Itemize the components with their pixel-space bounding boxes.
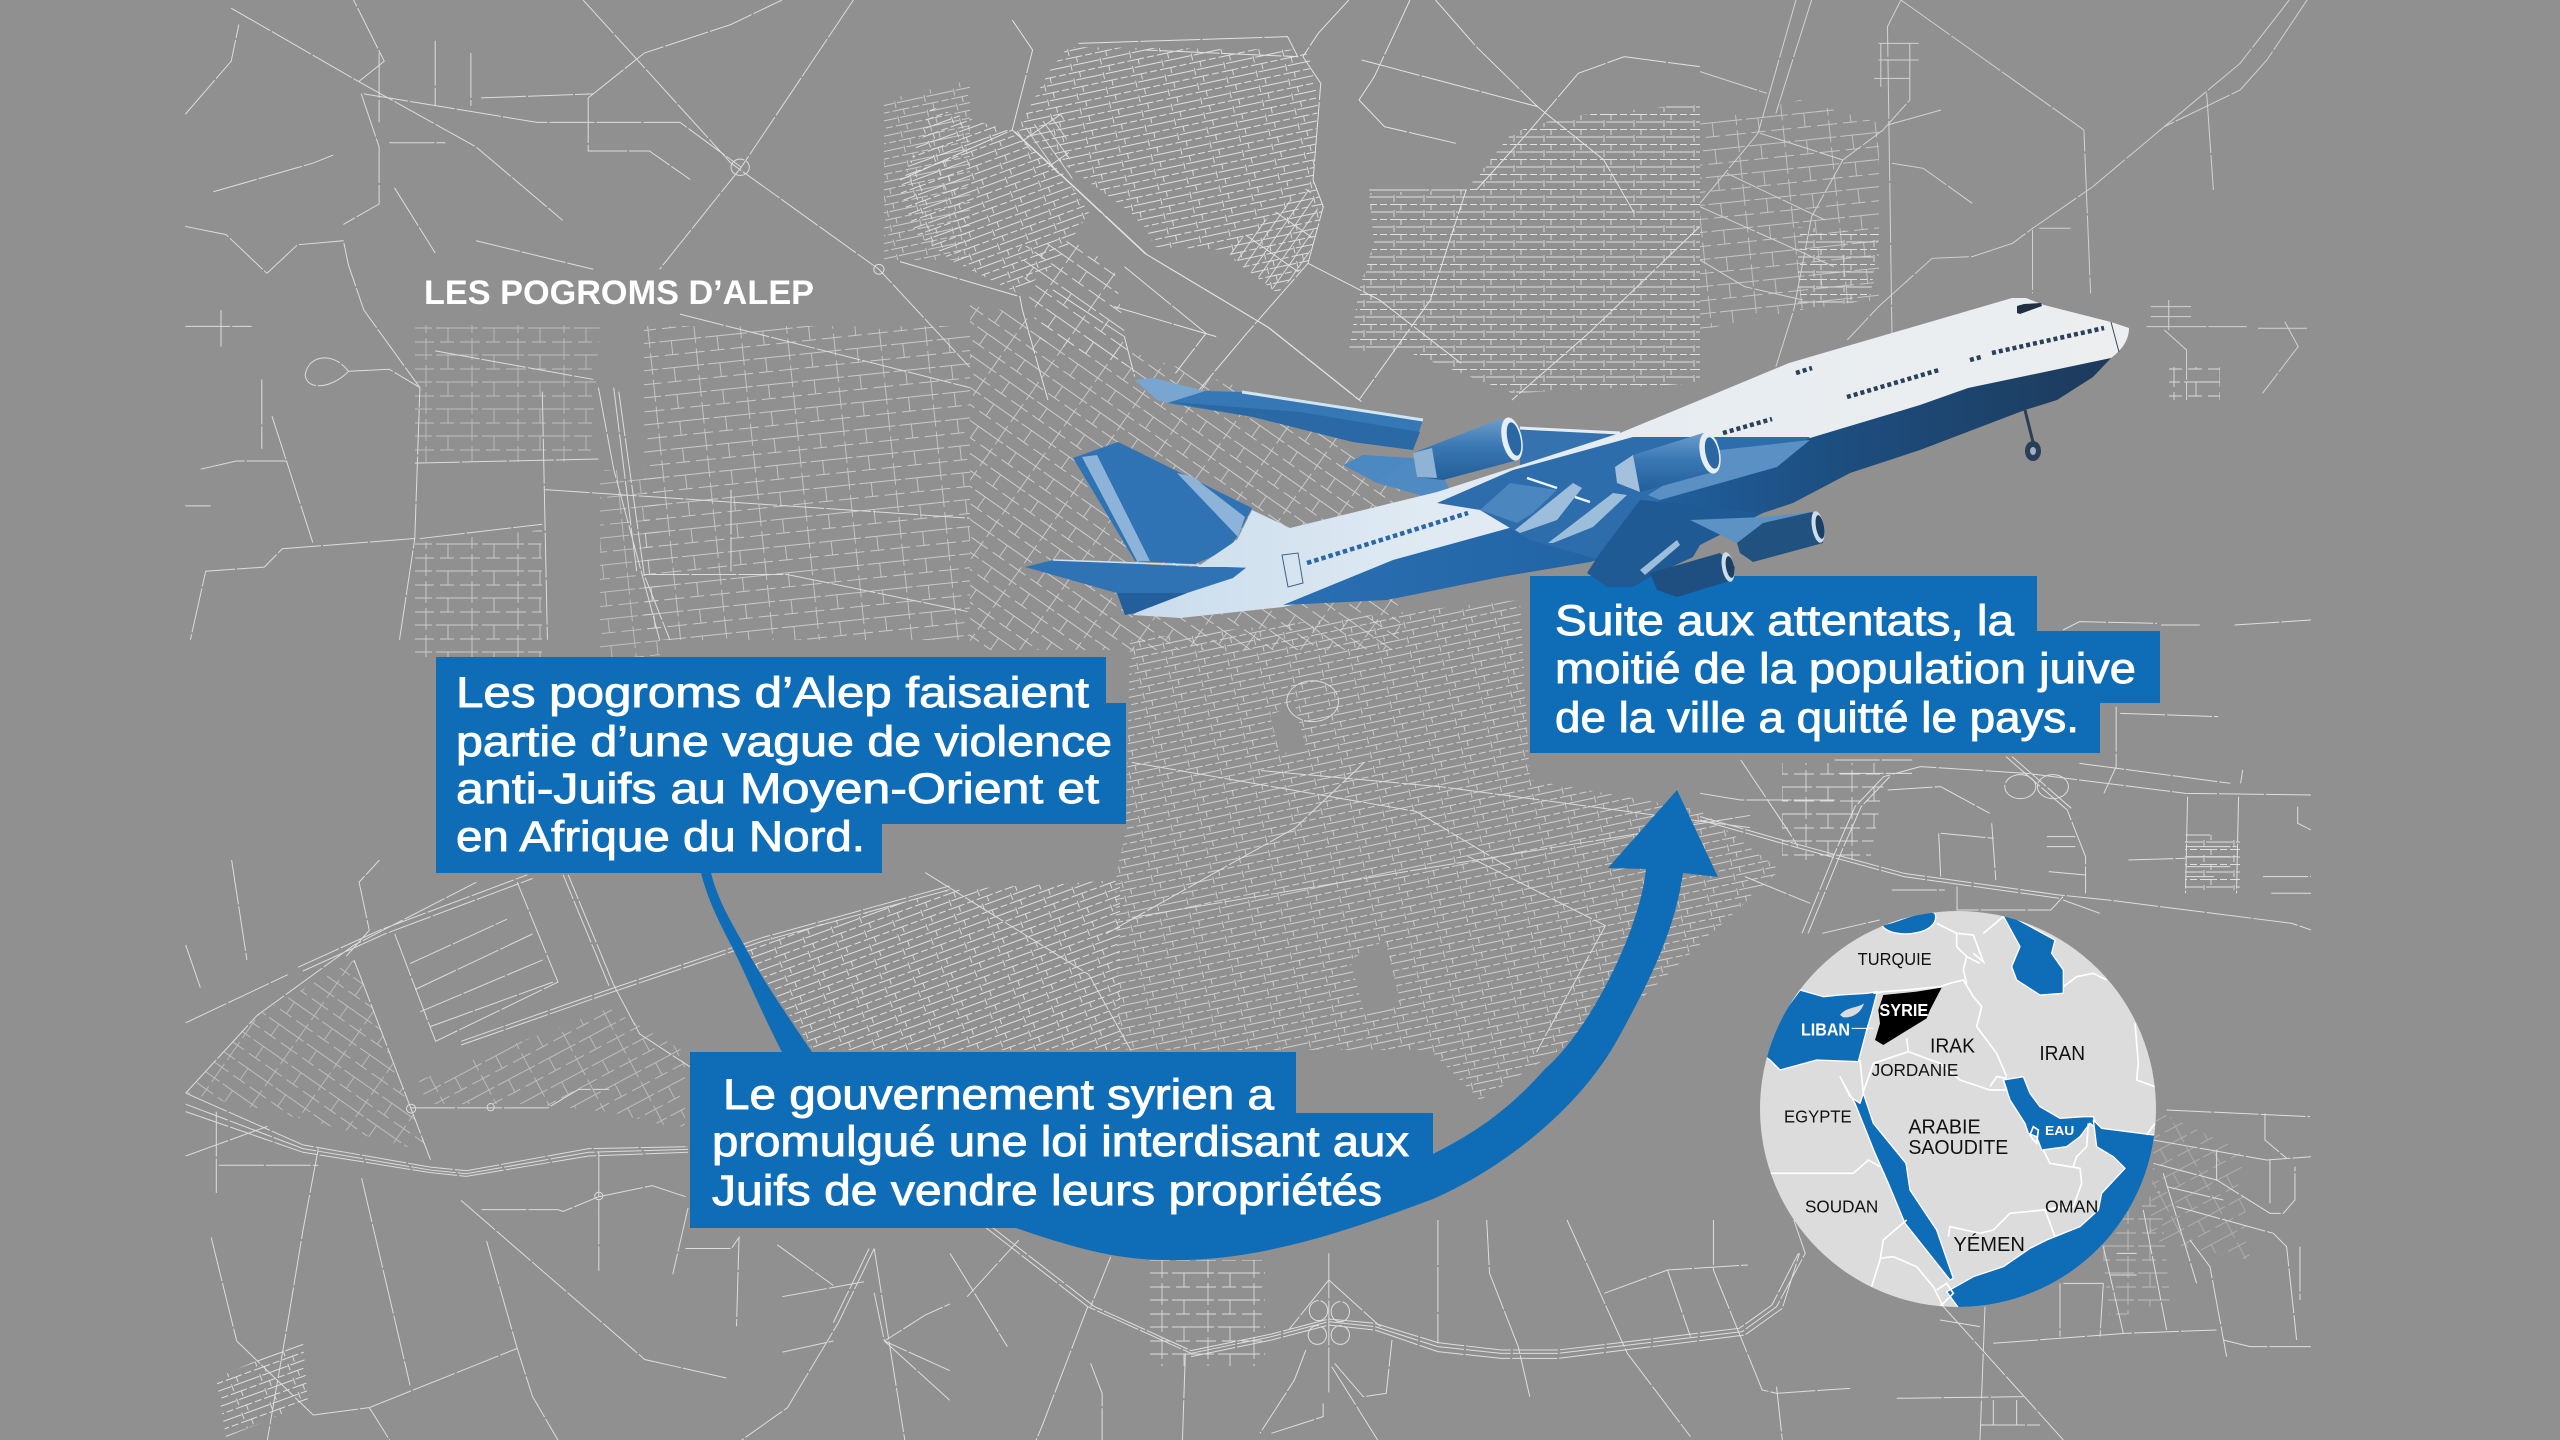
roads: right middle (1700, 620, 2311, 933)
country labels: SOUDAN (1805, 1197, 1878, 1217)
main roads: upper left (185, 0, 970, 640)
curved arrow (701, 790, 1718, 1260)
landing gear bay (1587, 500, 1763, 587)
fuselage (1133, 298, 2129, 618)
country labels: YÉMEN (1953, 1233, 2025, 1256)
land (1760, 911, 2156, 1307)
dense neighbourhood street textures (186, 47, 2250, 1437)
nose gear (2025, 410, 2041, 461)
text box: pogroms context (436, 657, 1126, 873)
title backing (410, 271, 823, 312)
country labels: OMAN (2045, 1197, 2098, 1217)
text box: pogroms context: en Afrique du Nord. (456, 813, 865, 861)
belly (1283, 358, 2111, 605)
sparse pockets between neighbourhoods (1105, 200, 1400, 1015)
near wing (1437, 437, 1810, 560)
text box: exodus: Suite aux attentats, la (1555, 597, 2014, 645)
country labels: SYRIE (1879, 1000, 1928, 1020)
text box: property law: Le gouvernement syrien a (723, 1071, 1274, 1119)
text box: pogroms context: anti-Juifs au Moyen-Orient et (456, 765, 1099, 813)
seas (1766, 912, 2154, 1307)
Syria (1875, 988, 1942, 1045)
locator globe (1760, 911, 2156, 1307)
country labels: JORDANIE (1872, 1060, 1958, 1080)
engine 3 (1690, 510, 1827, 562)
text box: exodus: moitié de la population juive (1555, 645, 2136, 693)
text box: pogroms context: partie d’une vague de violence (456, 718, 1112, 766)
country labels: EAU (2045, 1123, 2074, 1138)
main roads: centre (925, 681, 1750, 1052)
text box: exodus (1530, 576, 2160, 753)
borders (1770, 917, 2155, 1307)
highway interchange, lower centre (950, 1220, 1850, 1440)
text box: property law (690, 1052, 1433, 1228)
country labels (1784, 949, 2098, 1256)
title: LES POGROMS D’ALEP (424, 274, 814, 312)
country labels: IRAK (1930, 1035, 1976, 1057)
tail fin (1073, 442, 1252, 564)
engine 1 (1413, 415, 1526, 480)
windows (1307, 322, 2119, 563)
text box: property law: promulgué une loi interdisant aux (712, 1118, 1410, 1166)
engine 2 (1615, 430, 1724, 492)
country labels: SAOUDITE (1908, 1137, 2008, 1159)
country labels: ARABIE (1908, 1116, 1981, 1138)
country labels: IRAN (2039, 1043, 2085, 1065)
text box: exodus: de la ville a quitté le pays. (1555, 694, 2079, 742)
main roads: upper centre (900, 0, 1700, 402)
door (1282, 553, 1303, 587)
country labels: TURQUIE (1858, 949, 1932, 969)
airplane illustration (1025, 298, 2129, 618)
cockpit (2017, 303, 2042, 314)
text box: property law: Juifs de vendre leurs propriétés (712, 1167, 1382, 1215)
Cyprus (1840, 1003, 1864, 1017)
far wing (1135, 378, 1633, 503)
country labels: EGYPTE (1784, 1107, 1852, 1127)
roads: lower right (1897, 1110, 2312, 1440)
engine 4 (1640, 540, 1737, 597)
country labels: LIBAN (1801, 1020, 1850, 1040)
stabilizer (1025, 560, 1247, 615)
text box: pogroms context: Les pogroms d’Alep faisaient (456, 669, 1089, 717)
main roads: upper right (1700, 0, 2307, 400)
main roads: lower left (186, 860, 950, 1440)
